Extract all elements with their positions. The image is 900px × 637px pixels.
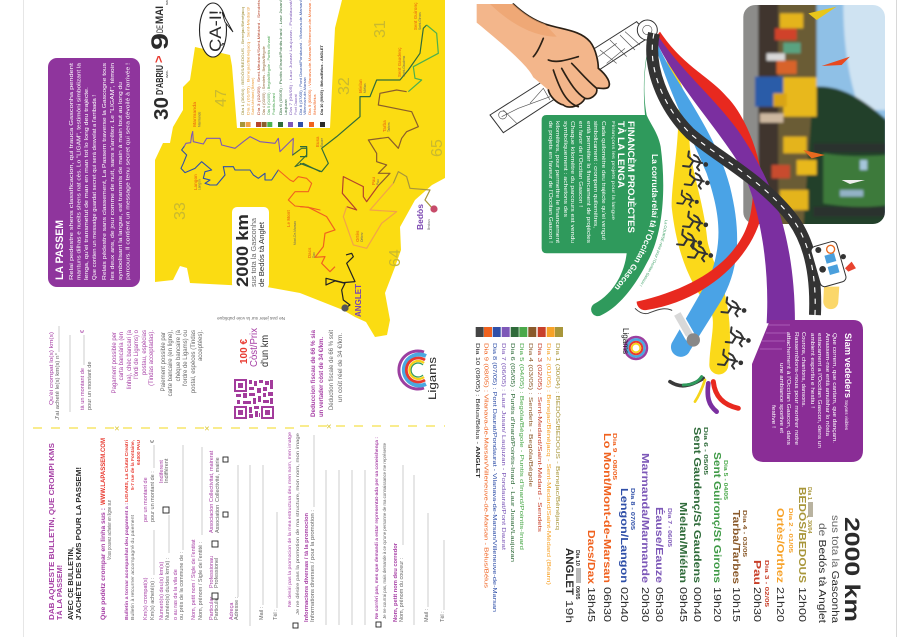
text block: tax deduction: un coût réel de 34 €/km. bbox=[338, 333, 344, 402]
text block: online purchase link: Que podètz crompar en linha sus : bbox=[100, 508, 107, 620]
map: city labels: Pau bbox=[371, 177, 376, 185]
text block: Gascon and French description: mantuns dilhas e nueits shens nat cès. Lo "LIGAM", testimòni simbolizant la bbox=[76, 63, 82, 280]
map: city labels: Sent Guironç bbox=[413, 2, 418, 30]
legend: map stages: Dia 3 (02/05) : Sent-Medard/Saint-Médard - Sendets bbox=[256, 0, 261, 115]
panel: Siam vededers bbox=[752, 320, 863, 462]
map: city labels: Bedòs bbox=[415, 204, 425, 230]
text block: Siam vededers body bbox=[770, 332, 837, 448]
schedule: day 9: 06h30 bbox=[601, 587, 612, 623]
text block: Financèm projèctes: Chaque kilomètre du parcours est vendu bbox=[569, 121, 575, 243]
form field: entity type checkboxes bbox=[209, 450, 228, 620]
title: 2000 km: de Bedós tà Anglet bbox=[816, 523, 827, 623]
text block: payment options: chèque bancaire (à bbox=[176, 329, 182, 381]
text block: Siam vededers body: estacament a l'Occitan Gascon, dens un bbox=[816, 333, 822, 448]
form field: entity type checkboxes: Particular bbox=[209, 597, 215, 620]
schedule: day 4 bbox=[730, 510, 747, 623]
form field: km number: Numerò(s) deu(s) km(s) bbox=[159, 561, 165, 620]
text block: Financèm projèctes: entà permèter lo financament de projèctes bbox=[585, 121, 591, 243]
callout: 2000 km on map: sus tota la Gasconha bbox=[251, 218, 258, 287]
schedule: day 10: 19h bbox=[563, 600, 574, 623]
map: city labels: Eusa bbox=[315, 136, 320, 147]
text block: payment options: (Tindas acceptadas). bbox=[149, 330, 155, 386]
heading: Siam vededers: Siam vededers bbox=[842, 333, 853, 398]
panel: purchase receipt: J'ai acheté le(s) km(s) n° bbox=[55, 353, 61, 420]
text block: Siam vededers body: Courons, chantons, dansons. bbox=[800, 332, 806, 407]
text block: Siam vededers body: ambient esportiu e hestiu ! bbox=[809, 333, 815, 409]
map: city labels: Dax bbox=[312, 252, 316, 258]
form: bulletin bbox=[47, 432, 446, 628]
legend: map stages: Dia 9 (08/05) : Vilanava-de-Marsan/Villeneuve-de-Marsan - bbox=[307, 0, 312, 115]
schedule: day 6: 09h45 bbox=[677, 587, 688, 623]
map: city labels bbox=[192, 2, 431, 317]
legend: map stages: Dia 8 (07/05) : Pont Daurat/Pondaurat - Vilanava-de-Marsan/ bbox=[298, 0, 303, 115]
logo: Ligams ring: Ligams bbox=[427, 356, 439, 400]
legend: map stages: Dia 7 (06/05) : Laur Jusan/ Laujuzan - Pondaurat/ bbox=[288, 0, 293, 115]
text block: Financèm projèctes: Finançons les projets pour la langue bbox=[611, 121, 616, 221]
map: city labels: Tarbes bbox=[387, 122, 391, 132]
panel: purchase receipt: pour un montant de bbox=[87, 361, 93, 410]
schedule: day 7: 05h30 bbox=[653, 587, 664, 623]
title: 2000 km: sus tota la Gasconha bbox=[829, 515, 840, 623]
text block: return address: LIGAMS, La Ciutat Creatri bbox=[124, 440, 129, 502]
icon: start and finish flags bbox=[341, 205, 438, 312]
text block: Gascon and French description: parcours. Il contient un message tenu secret qui sera dévoilé à l'arrivée ! bbox=[126, 62, 132, 280]
schedule: day 7: 20h30 bbox=[639, 587, 650, 623]
map: city labels: Marmanda bbox=[192, 101, 197, 127]
text block: Financèm projèctes: TÀ LA LENGA bbox=[616, 121, 626, 189]
schedule: day 5: Sent Guironç/St Girons bbox=[711, 452, 722, 584]
ribbons: relay ribbons and road bbox=[542, 31, 856, 412]
legend: map stages: Villeneuve-de-Marsan bbox=[302, 77, 307, 115]
schedule: day 9: Dia 9 - 08/05 bbox=[611, 433, 617, 480]
schedule: day 9: Dacs/Dax bbox=[585, 530, 596, 585]
text block: Siam vededers body: Rassemblons-nous pour montrer notre bbox=[793, 332, 799, 445]
text block: Gascon and French description: Relai pedestre shens classificacion, qui trauca Gasconha pendent bbox=[69, 62, 75, 280]
form field: name: Nom, petit nom / Sigle de l'entitat bbox=[191, 539, 197, 620]
form field: miscellaneous information: Informacions diversas / tà la promocion bbox=[304, 512, 310, 622]
schedule: day 10: 09/05 bbox=[574, 586, 580, 600]
schedule: day 1: BEDÒS/BEDOUS bbox=[796, 487, 809, 583]
title: dates 30 April to 9 May: AVRIL bbox=[165, 70, 169, 78]
schedule: day 1: 30/04 bbox=[806, 520, 812, 534]
heading: bulletin title: DAB AQUESTE BULLETIN, QUE CROMPI KMS bbox=[47, 443, 56, 620]
title: 2000 km: 2000 km bbox=[840, 517, 863, 622]
heading: bulletin title: TÀ LA PASSEM! bbox=[55, 565, 64, 620]
text: curved ribbon captions: La COURSE-relai pour l'Occitan Gascon ! bbox=[640, 220, 668, 286]
schedule: day 7: Dia 7 - 06/05 bbox=[666, 508, 672, 547]
form field: runner name and contact: Nom, petit nom deu corredor bbox=[393, 542, 399, 622]
title: dates 30 April to 9 May: MAI bbox=[154, 6, 166, 24]
text block: payment options: acceptées). bbox=[198, 330, 204, 361]
map: city labels: Miélan bbox=[363, 83, 367, 93]
text block: Gascon and French description: les deux ans, de jour comme de nuit, sans s'arrêter. Le "LIGAM", témoin bbox=[110, 63, 116, 280]
legend: map stages: Saint-Médard (Bèarn) bbox=[250, 77, 255, 115]
form field: entity type checkboxes: Particulier bbox=[214, 595, 220, 620]
legend: map stages: Dia 1 (30/04) : BEDÒS/BEDOUS - Benejac/Bénéjacq bbox=[240, 7, 245, 115]
text block: online purchase link: Vous pouvez acheter en ligne sur bbox=[107, 500, 113, 560]
schedule: day 5: Dia 5 - 04/05 bbox=[722, 460, 728, 500]
text block: Financèm projèctes: simbolicament : crompem quilomètres, bbox=[592, 121, 598, 229]
form field: km number bbox=[159, 458, 171, 620]
text block: tax deduction: Déduction fiscale de 66 % soit bbox=[329, 330, 335, 410]
form field: entity type checkboxes: Professionel bbox=[214, 558, 220, 588]
text block: return address: 64000 PAU bbox=[136, 439, 141, 465]
form field: entity type checkboxes: Professionau bbox=[209, 556, 215, 588]
form field: km number: Numéro(s) du/des km(s) : bbox=[165, 557, 171, 620]
ribbon: green with caption panel bbox=[542, 31, 663, 316]
text block: Siam vededers body: attachement à l'Occitan Gascon, dans bbox=[785, 332, 791, 445]
title: dates 30 April to 9 May: 9 bbox=[147, 33, 174, 50]
icon: QR code bbox=[235, 380, 273, 418]
map: city labels: Saint-Gaudens bbox=[402, 55, 406, 77]
schedule: day 7: Marmanda/Marmande bbox=[639, 453, 650, 584]
text block: payment options: Paiement possible par bbox=[161, 332, 167, 391]
legend: daily stage list: Dia 3 (02/05) : Sent-Medard/Saint-Médard - Sendets bbox=[536, 343, 542, 533]
text block: return address: Bulletin à retourner accompagné du paiement bbox=[130, 514, 135, 620]
legend: map stages: Dia 2 (01/05) : Benejac/Bénéjacq - Sent-Medard/ bbox=[246, 6, 250, 115]
form field: address: Mail : bbox=[259, 606, 265, 620]
legend: map stages: Laujuzan bbox=[283, 99, 288, 115]
text block: Gascon and French description: lenga, qu'ei transmetut de man en man tot lo long deu trajècte. bbox=[84, 87, 90, 280]
map: route stages west bbox=[181, 132, 320, 210]
schedule: day 7: Éause/Eauze bbox=[653, 507, 666, 584]
panel: purchase receipt: € bbox=[80, 329, 86, 333]
title: 2000 km bbox=[816, 515, 863, 623]
text block: Financèm projèctes: Cada quilomètre deu trajècte qu'ei vengut bbox=[600, 121, 606, 241]
icon: van with loudspeaker bbox=[810, 240, 856, 309]
form field: runner name and contact bbox=[393, 465, 446, 625]
schedule: day 4: Dia 4 - 03/05 bbox=[741, 510, 747, 557]
schedule: day 3 bbox=[751, 560, 769, 623]
legend: daily stage list: Dia 2 (01/05) : Benejac/Bénéjacq - Sent-Medard/Saint-Médard (Bèarn) bbox=[545, 343, 551, 585]
text block: Gascon and French description: symbolisant la langue, est transmis de main à main tout au long du bbox=[118, 82, 124, 280]
schedule: day 9: 18h45 bbox=[585, 587, 596, 623]
map: department numbers: 64 bbox=[387, 249, 404, 267]
map: city labels: Marmande bbox=[198, 112, 202, 127]
ribbon: purple bbox=[654, 35, 795, 323]
icon: Ça-i speech bubble: ÇA-I! bbox=[206, 10, 225, 52]
legend: daily stage list: Dia 10 (09/05) : Bèlus/Bélus - ANGLET bbox=[474, 343, 480, 479]
heading: bulletin title bbox=[47, 443, 83, 620]
schedule: day 2: 21h20 bbox=[774, 587, 785, 623]
form field: entity type checkboxes: Association bbox=[215, 505, 221, 533]
heading: La Passem: LA PASSEM bbox=[54, 220, 66, 280]
form field: km bought and amount: Km(s) acheté(s) : bbox=[150, 577, 156, 620]
map: department numbers: 31 bbox=[372, 20, 389, 38]
legend: map stages: Pont Daurat bbox=[293, 93, 298, 115]
map: route stages east bbox=[300, 25, 438, 308]
form field: km bought and amount: per un montant de bbox=[143, 477, 149, 522]
map: department numbers: 65 bbox=[429, 139, 446, 157]
form field: km bought and amount: € bbox=[150, 440, 156, 443]
text block: payment options: postal, espèces (Tindas bbox=[191, 330, 197, 393]
map: city labels: Pau bbox=[376, 179, 380, 185]
text block: Financèm projèctes: symboliquement : achetons des bbox=[562, 121, 568, 217]
callout: price per km: d'un km bbox=[260, 335, 271, 367]
logo: Ligams ring bbox=[399, 351, 439, 400]
legend: daily stage list: Dia 1 (30/04) : BEDÒS/BEDOUS - Benejac/Bénéjacq bbox=[554, 343, 561, 530]
panel: purchase receipt: Qu'èi crompat lo(s) km(s) bbox=[49, 332, 55, 405]
map: city labels: Tarba bbox=[382, 120, 387, 132]
schedule: stage times bbox=[563, 427, 813, 623]
schedule: day 2: Dia 2 - 01/05 bbox=[787, 508, 793, 553]
illustration: hand holding the baton bbox=[477, 4, 657, 133]
text block: payment options: postau, espècias bbox=[142, 330, 148, 375]
fold lines: yellow scissor cut marks: ✕ bbox=[114, 426, 120, 433]
schedule: day 2: Ortès/Orthez bbox=[774, 508, 785, 583]
schedule: day 3: Pau bbox=[751, 560, 762, 585]
text block: Siam vededers body: Que correm, que cantam, que dançam. bbox=[831, 333, 837, 443]
form field: km bought and amount: Km(s) crompat(s) bbox=[143, 577, 149, 620]
fold lines: yellow scissor cut marks bbox=[33, 424, 445, 433]
schedule: day 10: Dia 10 bbox=[574, 550, 580, 566]
schedule: day 9 bbox=[585, 433, 617, 623]
map: city labels: Saint-Girons bbox=[418, 12, 422, 30]
schedule: day 3: Dia 3 - 02/05 bbox=[763, 560, 769, 607]
text block: payment options: l'ordre de Ligams) ou bbox=[183, 330, 189, 386]
form field: town: o au ras de la vila de bbox=[173, 569, 179, 620]
schedule: day 7 bbox=[639, 453, 672, 623]
form field: name bbox=[191, 447, 204, 620]
text block: Financèm projèctes: de projets en faveur de l'Occitan Gascon ! bbox=[547, 121, 553, 244]
text block: Financèm projèctes: kilomètres, pour permettre le financement bbox=[554, 121, 560, 244]
form field: address bbox=[229, 465, 279, 626]
callout: price per km bbox=[239, 328, 271, 367]
text block: return address: 5-7 rue de la Fontaine, bbox=[130, 440, 135, 490]
text block: Siam vededers body: Amassem-nse entà amuishar lo nòsta bbox=[824, 333, 830, 436]
logo: Ligams small ring: Ligams bbox=[621, 328, 630, 354]
text block: online purchase link: WWW.LAPASSEM.COM bbox=[100, 438, 107, 505]
legend: map stages: Dia 5 (04/05) : Begòla/Bégole - Puntis d'Inard/ bbox=[266, 35, 271, 115]
legend: daily stage list: Dia 8 (07/05) : Pont Daurat/Pondaurat - Vilanava-de-Marsan/Villeneuve-de-Marsan bbox=[491, 343, 497, 612]
ribbon: yellow bbox=[663, 50, 730, 374]
form field: runner name and contact: Mail : bbox=[424, 608, 430, 622]
icon: hand bbox=[477, 4, 609, 107]
icon: microphone with cable bbox=[635, 308, 700, 347]
form field: name: Nom, prénom / Sigle de l'entité : bbox=[198, 541, 204, 620]
callout: 2000 km on map: de Bedós tà Anglet bbox=[259, 222, 266, 287]
text block: tax deduction: Deduccion fiscau de 66 % sia bbox=[311, 329, 317, 417]
map: department numbers bbox=[172, 20, 446, 267]
legend: daily stage list: Dia 5 (04/05) : Begòla/Bégole - Puntis d'Inard/Pointis-Inard bbox=[518, 343, 524, 550]
form field: runner name and contact: Tèl : bbox=[440, 611, 446, 622]
form field: address: Tèl : bbox=[273, 609, 279, 620]
text block: Gascon and French description bbox=[69, 62, 132, 280]
legend: map stages: Dia 6 (05/05) : Puntis d'Inard/Pointis-Inard - Laur Jusan/ bbox=[278, 0, 283, 115]
text block: tax deduction: un vertader còst de 34 €/km. bbox=[319, 337, 325, 417]
text block: return address: Bulletin a tornar acompanhat deu pagament a : bbox=[124, 502, 129, 620]
text block: online purchase link bbox=[100, 438, 113, 620]
text block: payment options bbox=[112, 329, 204, 396]
form field: town: ou près de la commune de : bbox=[179, 551, 185, 620]
map: department numbers: 47 bbox=[213, 89, 230, 107]
schedule: day 5: 19h20 bbox=[711, 587, 722, 623]
map: city labels: Dacs bbox=[307, 247, 312, 258]
schedule: day 8: 02h40 bbox=[618, 587, 629, 623]
schedule: day 10: ANGLET bbox=[563, 548, 575, 595]
heading: bulletin title: AVEC CE BULLETIN, bbox=[66, 547, 75, 620]
text block: return address bbox=[124, 439, 141, 620]
form field: km bought and amount bbox=[143, 440, 156, 620]
map: city labels: Bedous bbox=[427, 219, 431, 230]
schedule: day 1 bbox=[796, 487, 813, 623]
legend: daily stage list: Dia 6 (05/05) : Puntis d'Inard/Pointis-Inard - Laur Jusan/Laujuzan bbox=[509, 343, 515, 562]
map: city labels: Langon bbox=[198, 179, 202, 190]
text block: do not litter notice: Ne pas jeter sur la voie publique bbox=[216, 316, 285, 321]
schedule: day 5 bbox=[711, 452, 728, 623]
callout: price per km: 100 € bbox=[239, 339, 250, 364]
schedule: day 9: Lo Mont/Mont-de-Marsan bbox=[601, 433, 612, 583]
ribbon: blue bbox=[653, 37, 737, 357]
text block: Siam vededers body: une ambiance sportive et bbox=[778, 363, 784, 434]
form field: km number: Indiferent bbox=[159, 460, 165, 483]
legend: map stages: Bèlus/Bélus bbox=[312, 94, 317, 115]
panel: La Passem description bbox=[48, 58, 140, 287]
legend: daily stage list: Dia 4 (03/05) : Sendets - Begòla/Bégole bbox=[527, 343, 533, 487]
map: city labels: Mont-De-Marsan bbox=[293, 221, 297, 245]
form field: address: Adreça bbox=[229, 602, 235, 620]
callout: price per km: Còst/Prix bbox=[249, 328, 260, 367]
map: city labels: Sent Gaudenç bbox=[397, 47, 402, 77]
legend: daily stage list bbox=[474, 327, 563, 612]
fold lines: yellow scissor cut marks: ✕ bbox=[326, 424, 332, 431]
schedule: day 4: Tarba/Tarbes bbox=[730, 510, 741, 585]
map: city labels: Eauze bbox=[320, 138, 324, 147]
form field: km bought and amount: pour un montant de : bbox=[150, 471, 156, 522]
map: city labels: Mielan bbox=[358, 79, 363, 93]
legend: map stages: Pointis-Inard bbox=[271, 93, 276, 115]
map: city labels: Langon bbox=[193, 174, 198, 190]
panel: Siam vededers: Soyons visibles bbox=[844, 400, 849, 431]
form field: entity type checkboxes: Collectivité, mairie bbox=[215, 457, 221, 502]
text block: payment options: linha), chèc bancari (a bbox=[127, 329, 133, 389]
text: curved ribbon captions: La corruda-relai tà l'Occitan Gascon bbox=[614, 154, 658, 290]
form field: runner representative bbox=[374, 436, 387, 627]
title: dates 30 April to 9 May: 30 bbox=[151, 97, 173, 120]
legend: map stages: Dia 10 (09/05) : Bèlus/Bélus - ANGLET bbox=[319, 44, 324, 115]
map: city labels: ANGLET bbox=[353, 283, 363, 317]
heading: bulletin title: J'ACHÈTE DES KMS POUR LA PASSEM! bbox=[74, 467, 83, 620]
form field: km number: Indifférent bbox=[164, 458, 170, 483]
form field: runner name and contact: Nom, prénom du coureur : bbox=[399, 557, 405, 622]
title: dates 30 April to 9 May bbox=[147, 0, 174, 120]
form field: image consent: Je ne désire pas la promotion de ma structure, mon nom, mon image bbox=[295, 433, 301, 615]
road: black winding road bbox=[652, 33, 815, 315]
ribbon: red bbox=[637, 32, 764, 310]
form field: entity type checkboxes: Associacion Collectivitat, mairerat bbox=[209, 450, 215, 533]
schedule: day 3: 20h30 bbox=[751, 587, 762, 623]
photo: relay runners crowd bbox=[740, 2, 888, 228]
schedule: day 4: 10h15 bbox=[730, 587, 741, 623]
schedule: day 6 bbox=[677, 427, 708, 623]
schedule: day 1: 12h00 bbox=[796, 587, 807, 623]
icon: carved baton bbox=[490, 20, 657, 133]
text block: payment options: carta bancària (en bbox=[119, 332, 125, 380]
callout: 2000 km on map: 2000 km bbox=[233, 214, 252, 287]
icon: Ça-i speech bubble bbox=[200, 3, 233, 57]
form field: image consent: Ne desiri pas la promocion de la mea estructura deu men nom, men imatge bbox=[287, 432, 293, 607]
map: city labels: Le Mont bbox=[286, 210, 291, 227]
schedule: day 10 bbox=[563, 548, 581, 623]
map: city labels: Ortès bbox=[355, 230, 360, 242]
map: department numbers: 33 bbox=[172, 202, 189, 220]
form field: miscellaneous information bbox=[304, 435, 365, 625]
text block: Gascon and French description: Relais pédestre sans classement, La Passem traverse la Gascogne tous bbox=[102, 63, 108, 280]
form field: runner representative: Je ne courrai pas, mais demande à ce qu'une personne de ma connaissance me représente bbox=[382, 442, 387, 619]
map: city labels: Orthez bbox=[360, 232, 364, 242]
schedule: day 1: Dia 1 bbox=[806, 487, 812, 500]
legend: map stages: Dia 4 (03/05) : Sendets - Begòla/Bégole bbox=[261, 46, 266, 115]
legend: daily stage list: Dia 9 (08/05) : Vilanava-de-Marsan/Villeneuve-de-Marsan - Bèlus/Bélus bbox=[482, 343, 488, 589]
form field: town bbox=[173, 445, 185, 620]
map: department numbers: 32 bbox=[336, 77, 353, 95]
text block: Financèm projèctes: FINANCÈM PROJÈCTES bbox=[626, 121, 636, 233]
text block: Gascon and French description: Que contien un messatge guardat secret qui serà desvelat a l'arribada ! bbox=[92, 94, 98, 280]
legend: map stages bbox=[240, 0, 325, 127]
legend: daily stage list: Dia 7 (06/05) : Laur Jusan/ Laujuzan - Pondaurat/Pont Daurat bbox=[500, 343, 506, 551]
ribbon tails below microphone bbox=[670, 377, 738, 412]
text block: Financèm projèctes: en favor de l'Occitan Gascon ! bbox=[577, 121, 583, 208]
panel: purchase receipt bbox=[49, 326, 93, 420]
schedule: day 8: Lengon/Langon bbox=[618, 488, 629, 583]
text block: tax deduction bbox=[311, 329, 344, 417]
logo: Ligams small ring bbox=[621, 328, 647, 359]
schedule: day 6: 00h40 bbox=[691, 587, 702, 623]
schedule: day 8: Dia 8 - 07/05 bbox=[629, 488, 635, 530]
schedule: day 6: Dia 6 - 05/05 bbox=[702, 427, 708, 475]
schedule: day 6: Mielan/Miélan bbox=[677, 502, 688, 583]
schedule: day 6: Sent Gaudenç/St Gaudens bbox=[691, 427, 702, 584]
fold lines: yellow scissor cut marks: ✕ bbox=[204, 426, 210, 433]
schedule: day 8 bbox=[618, 488, 635, 623]
schedule: day 2 bbox=[774, 508, 793, 623]
form field: image consent bbox=[287, 432, 301, 628]
form field: runner representative: Ne corrèri pas, mes que demandi a estar representat-ada per ua coneishença : bbox=[374, 436, 379, 619]
form field: address: Adresse : bbox=[234, 596, 240, 620]
text block: Financèm projèctes bbox=[547, 121, 636, 244]
title: dates 30 April to 9 May: D'ABRIU bbox=[155, 65, 166, 95]
text block: payment options: Pagament possible per bbox=[112, 332, 118, 393]
text block: payment options: l'òrdi de Ligams) o bbox=[134, 329, 140, 379]
form field: miscellaneous information: Informations diverses / pour la promotion : bbox=[310, 509, 316, 622]
panel: purchase receipt: tà un montant de bbox=[80, 368, 86, 410]
text block: Siam vededers body: festive ! bbox=[770, 405, 776, 429]
text block: payment options: carte bancaire (en ligne), bbox=[168, 330, 174, 396]
map: Gascony yellow territory bbox=[155, 0, 446, 337]
title: dates 30 April to 9 May: > bbox=[151, 55, 166, 63]
icons: silhouette runners bbox=[677, 151, 751, 369]
title: dates 30 April to 9 May: DE bbox=[155, 25, 165, 33]
title: dates 30 April to 9 May: MAI bbox=[165, 0, 169, 5]
callout: 2000 km on map bbox=[232, 207, 269, 289]
